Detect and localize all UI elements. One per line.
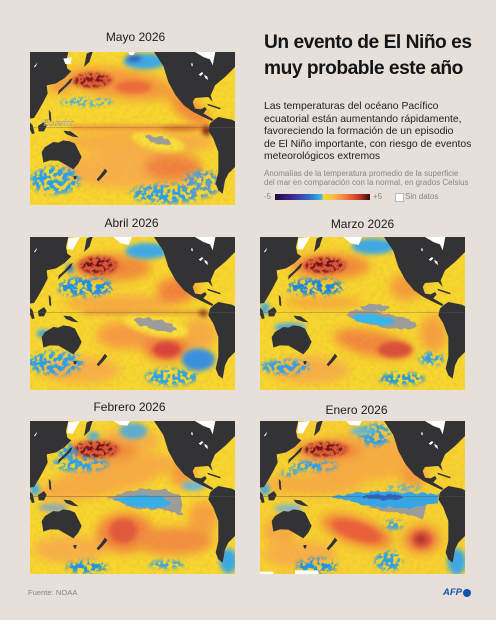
equator line (30, 495, 235, 498)
title (264, 32, 472, 348)
warm anomalies (30, 421, 235, 574)
land masses (260, 237, 465, 379)
equator line (30, 126, 235, 129)
map title: Marzo 2026: Marzo 2026 (331, 217, 394, 231)
logo wordmark: AFP (443, 587, 462, 598)
cool anomalies (260, 238, 444, 385)
legend max label: +5 (373, 192, 382, 201)
intro text block (264, 101, 471, 162)
cool anomalies (30, 423, 237, 574)
cool anomalies (30, 53, 222, 204)
no-data patch (330, 492, 440, 519)
map: sea surface anomaly April (30, 237, 235, 390)
sea ice (67, 237, 132, 250)
map title: Mayo 2026: Mayo 2026 (106, 30, 165, 44)
map: sea surface anomaly May (30, 52, 235, 205)
title: muy probable este año (264, 58, 463, 79)
map: sea surface anomaly February (30, 421, 235, 574)
intro text block: Las temperaturas del océano Pacífico (264, 101, 438, 112)
colour scale bar (275, 194, 370, 200)
source: Fuente: NOAA (28, 588, 77, 597)
cool anomalies (260, 424, 466, 575)
land masses (30, 52, 235, 194)
intro text block: favoreciendo la formación de un episodio (264, 126, 453, 137)
no-data patch (346, 304, 417, 333)
no-data patch (107, 489, 183, 516)
intro text block: meteorológicos extremos (264, 151, 380, 162)
map title: Febrero 2026: Febrero 2026 (93, 400, 166, 414)
intro text block: ecuatorial están aumentando rápidamente, (264, 114, 462, 125)
map: sea surface anomaly March (260, 237, 465, 390)
AFP logo (442, 587, 471, 598)
no-data patch (145, 134, 172, 147)
no-data swatch (395, 193, 404, 202)
legend caption: del mar en comparación con la normal, en grados Celsius (264, 178, 469, 187)
warm anomalies (30, 52, 235, 205)
sea ice (67, 421, 130, 434)
intro text block: de El Niño importante, con riesgo de eventos (264, 139, 471, 150)
land masses (30, 237, 235, 379)
equator line (30, 311, 235, 314)
land masses (260, 421, 465, 563)
warm anomalies (260, 237, 465, 390)
equator label: Ecuador (43, 118, 73, 127)
legend caption: Anomalías de la temperatura promedio de la superficie (264, 168, 458, 178)
warm anomalies (260, 421, 465, 574)
no-data label: Sin datos (405, 192, 438, 201)
warm anomalies (30, 237, 235, 390)
equator line (260, 495, 465, 498)
cool anomalies (27, 243, 215, 385)
map title: Enero 2026: Enero 2026 (325, 403, 388, 417)
panel: febrero 2026 map (30, 400, 235, 574)
equator line (260, 311, 465, 314)
panel: marzo 2026 map (260, 217, 465, 390)
sea ice (63, 52, 135, 64)
sea ice (260, 421, 362, 574)
no-data patch (132, 314, 178, 335)
legend caption (264, 168, 469, 187)
title: Un evento de El Niño es (264, 32, 472, 53)
sea ice (297, 237, 362, 250)
land masses (30, 421, 235, 563)
panel: abril 2026 map (30, 216, 235, 390)
map title: Abril 2026: Abril 2026 (104, 216, 159, 230)
panel: mayo 2026 map (30, 30, 235, 205)
panel: enero 2026 map (260, 310, 465, 574)
logo dot (463, 589, 471, 597)
map: sea surface anomaly January (260, 421, 465, 574)
legend (264, 192, 438, 202)
legend min label: -5 (264, 192, 271, 201)
